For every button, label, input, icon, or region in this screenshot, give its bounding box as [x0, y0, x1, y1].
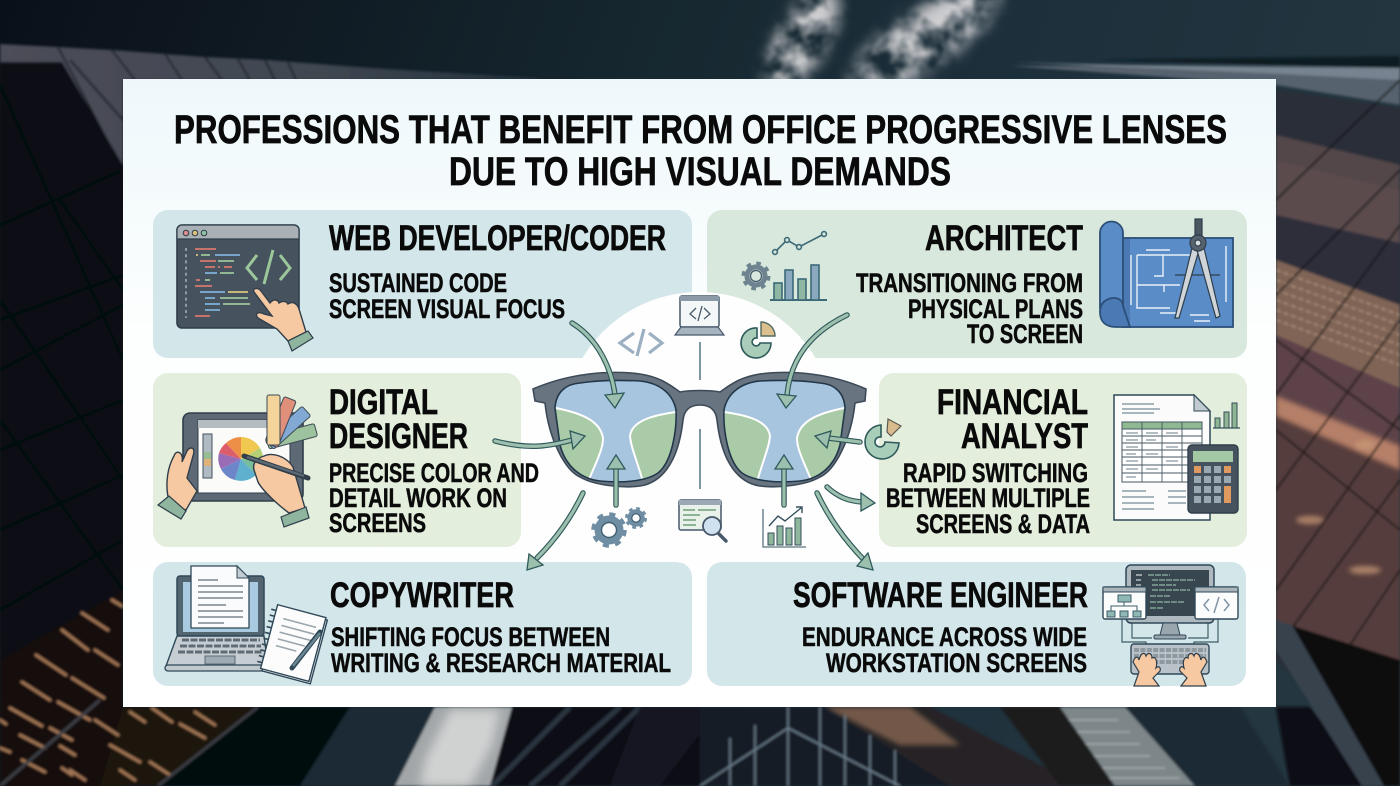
text: web developer description: SUSTAINED CODE — [329, 268, 507, 298]
text: financial analyst description: SCREENS & DATA — [916, 509, 1090, 539]
text: software engineer description: WORKSTATION SCREENS — [826, 648, 1087, 678]
text: financial analyst description: RAPID SWITCHING — [903, 458, 1088, 488]
arrow: up left — [607, 455, 625, 505]
text: digital designer description — [329, 458, 539, 538]
text: web developer description: SCREEN VISUAL FOCUS — [329, 294, 565, 324]
white content panel — [123, 79, 1276, 707]
icon: blueprint and compass — [1100, 219, 1233, 327]
icon: rising bar chart — [763, 507, 806, 547]
arrow: small to financial analyst — [827, 487, 875, 511]
panel: digital designer — [153, 373, 539, 547]
text: software engineer description — [802, 622, 1087, 678]
icon: tablet with colour wheel — [158, 395, 318, 527]
icon: pie chart — [865, 419, 901, 459]
icon: browser with magnifier — [679, 500, 726, 541]
icon: pie chart — [741, 322, 775, 358]
lit windows lower left — [0, 590, 260, 786]
panel: financial analyst — [865, 373, 1247, 547]
left lens green near zones — [556, 407, 676, 479]
text: digital designer description: SCREENS — [329, 508, 426, 538]
arrow: digital designer — [495, 431, 585, 449]
heading: digital designer — [329, 383, 468, 456]
text: financial analyst description — [886, 458, 1090, 539]
glasses with progressive lenses — [533, 372, 866, 492]
text: copywriter description: WRITING & RESEARCH MATERIAL — [331, 648, 671, 678]
arrow: copywriter — [527, 493, 583, 570]
panel: architect — [707, 210, 1247, 358]
arrow: software engineer — [817, 493, 873, 570]
arrow: financial analyst — [815, 431, 860, 448]
connector lines — [699, 342, 701, 489]
title — [174, 108, 1227, 194]
panel: software engineer — [707, 562, 1246, 686]
text: digital designer description: PRECISE COLOR AND — [329, 458, 539, 488]
text: digital designer description: DETAIL WORK ON — [329, 483, 507, 513]
icon: multi-screen workstation — [1103, 565, 1238, 686]
lower centre — [160, 707, 435, 786]
panel: copywriter — [153, 562, 692, 686]
text: web developer description — [329, 268, 565, 324]
frame — [533, 372, 866, 487]
text: software engineer description: ENDURANCE ACROSS WIDE — [802, 622, 1087, 652]
heading: digital designer: DESIGNER — [329, 417, 468, 456]
heading: copywriter: COPYWRITER — [330, 576, 514, 615]
right building — [1276, 90, 1400, 786]
heading: software engineer: SOFTWARE ENGINEER — [793, 576, 1088, 615]
text: architect description: TRANSITIONING FROM — [856, 268, 1083, 298]
title: DUE TO HIGH VISUAL DEMANDS — [449, 150, 951, 194]
icon: code window with pointing hand — [177, 225, 313, 351]
arrow: web developer — [572, 323, 624, 408]
heading: web developer: WEB DEVELOPER/CODER — [329, 219, 666, 258]
heading: architect: ARCHITECT — [925, 219, 1083, 258]
left lens — [554, 380, 677, 483]
icon: spreadsheet and calculator — [1114, 395, 1240, 520]
icon: laptop and notebook — [165, 566, 328, 684]
heading: financial analyst: FINANCIAL — [937, 383, 1088, 422]
heading: digital designer: DIGITAL — [329, 383, 438, 422]
icon: gear and bar chart — [744, 232, 827, 300]
text: architect description: PHYSICAL PLANS — [908, 294, 1083, 324]
left hand — [167, 448, 197, 510]
panel: web developer — [153, 210, 692, 358]
text: copywriter description — [331, 622, 671, 678]
right lens — [723, 380, 846, 483]
text: financial analyst description: BETWEEN MULTIPLE — [886, 483, 1090, 513]
white dome behind the glasses — [563, 292, 835, 564]
text: architect description: TO SCREEN — [967, 319, 1083, 349]
heading: financial analyst — [937, 383, 1088, 456]
arrow: architect — [777, 315, 847, 408]
arrows pointing to the lenses — [495, 315, 875, 570]
icon: gears — [594, 508, 646, 546]
heading: financial analyst: ANALYST — [961, 417, 1088, 456]
icon: code brackets — [620, 329, 662, 356]
arrow: up right — [775, 455, 793, 505]
text: architect description — [856, 268, 1083, 349]
right lens green near zones — [724, 407, 844, 479]
right hand with stylus — [254, 454, 305, 513]
text: copywriter description: SHIFTING FOCUS BETWEEN — [331, 622, 610, 652]
swatches — [265, 395, 318, 449]
icon: laptop — [675, 296, 724, 335]
sky clouds — [751, 0, 1014, 110]
